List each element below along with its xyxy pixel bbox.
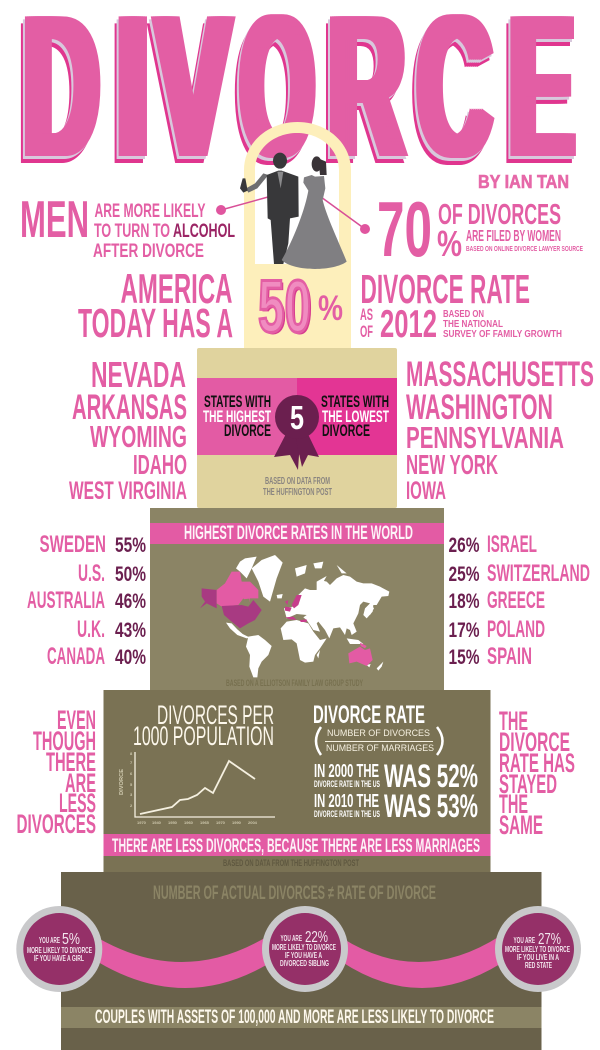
cake tier 4 bbox=[104, 690, 490, 872]
source note: Huffington Post: BASED ON DATA FROM bbox=[265, 476, 330, 487]
stat circle: 22 percent: IF YOU HAVE A bbox=[285, 951, 322, 960]
heading: divorces per 1000 population: 1000 POPULATION bbox=[133, 721, 274, 751]
stat circle: 22 percent bbox=[262, 906, 348, 992]
text: states with the lowest divorce bbox=[321, 392, 389, 440]
list: lowest divorce states bbox=[406, 355, 594, 505]
text block: the divorce rate has stayed the same: THE bbox=[499, 706, 528, 736]
list: percentages highest: 40% bbox=[115, 646, 146, 669]
text: states with the highest divorce: STATES WITH bbox=[204, 392, 271, 411]
list: percentages right: 15% bbox=[448, 646, 480, 669]
list: percentages right: 26% bbox=[448, 534, 480, 557]
heading: divorces per 1000 population: DIVORCES PER bbox=[157, 700, 274, 730]
callout: connector lines bbox=[216, 197, 370, 234]
text block: 70 percent filed by women bbox=[377, 185, 583, 273]
text block: divorce rate as of 2012: BASED ON bbox=[443, 309, 484, 320]
text block: 70 percent filed by women: 70 bbox=[377, 185, 432, 273]
decoration: pink swags bbox=[98, 936, 500, 988]
list: countries right bbox=[487, 531, 590, 670]
icon: bride and groom bbox=[240, 153, 347, 269]
stat: 2010 rate: DIVORCE RATE IN THE US bbox=[314, 809, 380, 819]
list: countries highest: SWEDEN bbox=[40, 531, 106, 558]
text block: even though there are less divorces: LESS bbox=[59, 788, 96, 818]
chart: divorces line chart: 8 bbox=[130, 751, 133, 756]
text block: divorce rate as of 2012: SURVEY OF FAMILY GROWTH bbox=[443, 329, 562, 340]
chart: divorces line chart: 5 bbox=[130, 782, 133, 787]
stat: 2010 rate: IN 2010 THE bbox=[314, 791, 379, 811]
list: countries highest bbox=[27, 531, 106, 670]
text block: men alcohol: ALCOHOL bbox=[173, 221, 235, 242]
cake tier 1: arch bbox=[244, 122, 351, 348]
list: percentages highest: 50% bbox=[115, 563, 146, 586]
list: percentages highest: 43% bbox=[115, 619, 146, 642]
stat circle: 22 percent: MORE LIKELY TO DIVORCE bbox=[272, 943, 336, 952]
text block: even though there are less divorces bbox=[16, 705, 96, 839]
text block: divorce rate as of 2012: AS bbox=[360, 305, 373, 324]
list: countries right: ISRAEL bbox=[487, 531, 537, 558]
stat: 50 percent: 50 bbox=[258, 265, 311, 348]
text block: even though there are less divorces: THERE bbox=[46, 747, 96, 777]
source note: map: BASED ON A ELLIOTSON FAMILY LAW GROUP STUDY bbox=[226, 678, 363, 688]
list: countries highest: U.K. bbox=[77, 616, 105, 643]
source note: Huffington Post second: BASED ON DATA FROM THE HUFFINGTON POST bbox=[223, 858, 359, 868]
text block: even though there are less divorces: THOUGH bbox=[33, 726, 96, 756]
text: states with the highest divorce bbox=[203, 392, 271, 440]
text: states with the lowest divorce: THE LOWEST bbox=[322, 407, 389, 426]
list: percentages highest: 46% bbox=[115, 590, 146, 613]
stat: 2000 rate: DIVORCE RATE IN THE US bbox=[314, 779, 380, 789]
list: countries right: POLAND bbox=[487, 616, 545, 643]
heading band: highest divorce rates in the world: HIGHEST DIVORCE RATES IN THE WORLD bbox=[184, 523, 413, 544]
list: highest divorce states: NEVADA bbox=[91, 354, 186, 395]
stat circle: 5 percent: IF YOU HAVE A GIRL bbox=[34, 954, 84, 963]
stat: 2000 rate bbox=[314, 758, 478, 794]
text: states with the lowest divorce: STATES WITH bbox=[321, 392, 389, 411]
stat circle: 5 percent: YOU ARE bbox=[39, 936, 60, 945]
text block: men alcohol: MEN bbox=[20, 191, 89, 249]
list: percentages right: 25% bbox=[448, 563, 480, 586]
text block: divorce rate as of 2012 bbox=[360, 266, 562, 346]
chart: divorces line chart: 6 bbox=[130, 771, 133, 776]
text block: divorce rate as of 2012: THE NATIONAL bbox=[443, 319, 503, 330]
list: highest divorce states bbox=[69, 354, 187, 505]
text block: the divorce rate has stayed the same bbox=[499, 706, 575, 840]
formula: divorce rate: DIVORCE RATE bbox=[313, 701, 425, 729]
list: percentages right: 17% bbox=[448, 619, 480, 642]
chart: divorces line chart: 1970 bbox=[216, 820, 226, 825]
source note: Huffington Post bbox=[263, 476, 332, 498]
text block: even though there are less divorces: DIVORCES bbox=[16, 809, 96, 839]
credit: by Ian Tan: BY IAN TAN bbox=[478, 172, 569, 192]
stat: 2000 rate: WAS 52% bbox=[384, 758, 478, 794]
cake tier 3 bbox=[150, 508, 444, 690]
formula: divorce rate: NUMBER OF MARRIAGES bbox=[326, 743, 434, 754]
stat: 2010 rate: WAS 53% bbox=[384, 788, 478, 824]
chart: world map bbox=[200, 555, 389, 677]
stat circle: 22 percent: 22% bbox=[305, 929, 328, 946]
text block: men alcohol: TO TURN TO bbox=[94, 221, 170, 242]
text block: the divorce rate has stayed the same: THE bbox=[499, 789, 528, 819]
text block: men alcohol bbox=[20, 191, 235, 262]
stat circle: 27 percent bbox=[495, 906, 581, 992]
list: highest divorce states: WYOMING bbox=[90, 419, 187, 454]
formula: divorce rate: NUMBER OF DIVORCES bbox=[327, 728, 430, 739]
stat circle: 5 percent: 5% bbox=[62, 931, 80, 948]
formula: divorce rate bbox=[313, 701, 442, 755]
text block: America today has a bbox=[78, 265, 233, 346]
stat circle: 27 percent: YOU ARE bbox=[514, 936, 535, 945]
chart: divorces line chart: 1970 bbox=[137, 820, 147, 825]
stat circle: 5 percent bbox=[16, 906, 102, 992]
list: percentages highest: 55% bbox=[115, 534, 146, 557]
chart: divorces line chart: 1960 bbox=[184, 820, 194, 825]
list: percentages right: 18% bbox=[448, 590, 480, 613]
cake tier 5 bbox=[61, 872, 542, 1050]
stat: 50 percent: % bbox=[318, 289, 343, 328]
list: countries highest: AUSTRALIA bbox=[27, 587, 105, 614]
list: highest divorce states: IDAHO bbox=[133, 449, 187, 480]
chart: divorces line chart: 1940 bbox=[152, 820, 162, 825]
title: DIVORCE bbox=[18, 0, 576, 170]
list: highest divorce states: ARKANSAS bbox=[72, 388, 187, 427]
icon: ribbon badge 5 bbox=[274, 395, 319, 470]
text: states with the lowest divorce: DIVORCE bbox=[322, 421, 370, 440]
icon: ribbon badge 5: 5 bbox=[290, 399, 304, 436]
text block: even though there are less divorces: ARE bbox=[65, 768, 96, 798]
chart: divorces line chart: 2 bbox=[130, 803, 133, 808]
chart: divorces line chart: DIVORCE bbox=[119, 768, 125, 795]
chart: divorces line chart: 1990 bbox=[232, 820, 242, 825]
heading band: highest divorce rates in the world bbox=[150, 523, 444, 544]
text: states with the highest divorce: THE HIGHEST bbox=[203, 407, 271, 426]
chart: divorces line chart: 1950 bbox=[168, 820, 178, 825]
text block: even though there are less divorces: EVEN bbox=[57, 705, 96, 735]
stat: 2000 rate: IN 2000 THE bbox=[314, 761, 379, 781]
panel: 5 states band bbox=[197, 378, 397, 470]
stat circle: 27 percent: IF YOU LIVE IN A bbox=[517, 953, 559, 962]
stat circle: 22 percent: YOU ARE bbox=[280, 934, 302, 943]
chart: divorces line chart: 7 bbox=[130, 760, 133, 765]
chart: divorces line chart: 3 bbox=[130, 792, 133, 797]
stat circle: 5 percent: MORE LIKELY TO DIVORCE bbox=[27, 946, 92, 955]
stat circle: 22 percent: DIVORCED SIBLING bbox=[280, 959, 329, 968]
stat circle: 27 percent: 27% bbox=[538, 931, 561, 948]
text block: divorce rate as of 2012: 2012 bbox=[380, 303, 437, 346]
list: countries highest: CANADA bbox=[47, 643, 105, 670]
text block: America today has a: AMERICA bbox=[120, 265, 232, 312]
chart: divorces line chart bbox=[119, 751, 275, 825]
list: highest divorce states: WEST VIRGINIA bbox=[69, 477, 187, 505]
stat: 50 percent: 50 bbox=[260, 267, 313, 350]
stat: 2010 rate bbox=[314, 788, 478, 824]
text: states with the highest divorce: DIVORCE bbox=[224, 421, 271, 440]
text block: men alcohol: AFTER DIVORCE bbox=[93, 241, 204, 262]
source note: Huffington Post: THE HUFFINGTON POST bbox=[263, 487, 332, 498]
heading: divorces per 1000 population bbox=[133, 700, 274, 751]
list: countries right: SPAIN bbox=[487, 643, 532, 670]
cake tier 2 bbox=[197, 348, 397, 508]
text block: men alcohol: ARE MORE LIKELY bbox=[94, 201, 206, 222]
list: lowest divorce states: IOWA bbox=[406, 477, 446, 505]
text block: divorce rate as of 2012: OF bbox=[360, 322, 373, 341]
list: countries highest: U.S. bbox=[78, 560, 105, 587]
text block: 70 percent filed by women: % bbox=[437, 223, 462, 264]
list: countries right: GREECE bbox=[487, 587, 545, 614]
stat circle: 27 percent: RED STATE bbox=[525, 961, 552, 970]
list: percentages right bbox=[448, 534, 480, 669]
list: percentages highest bbox=[115, 534, 146, 669]
chart: divorces line chart: 2004 bbox=[248, 820, 258, 825]
text block: America today has a: TODAY HAS A bbox=[78, 300, 233, 346]
list: lowest divorce states: NEW YORK bbox=[406, 449, 498, 480]
text block: the divorce rate has stayed the same: SAME bbox=[499, 810, 543, 840]
chart: divorces line chart: 1965 bbox=[200, 820, 210, 825]
